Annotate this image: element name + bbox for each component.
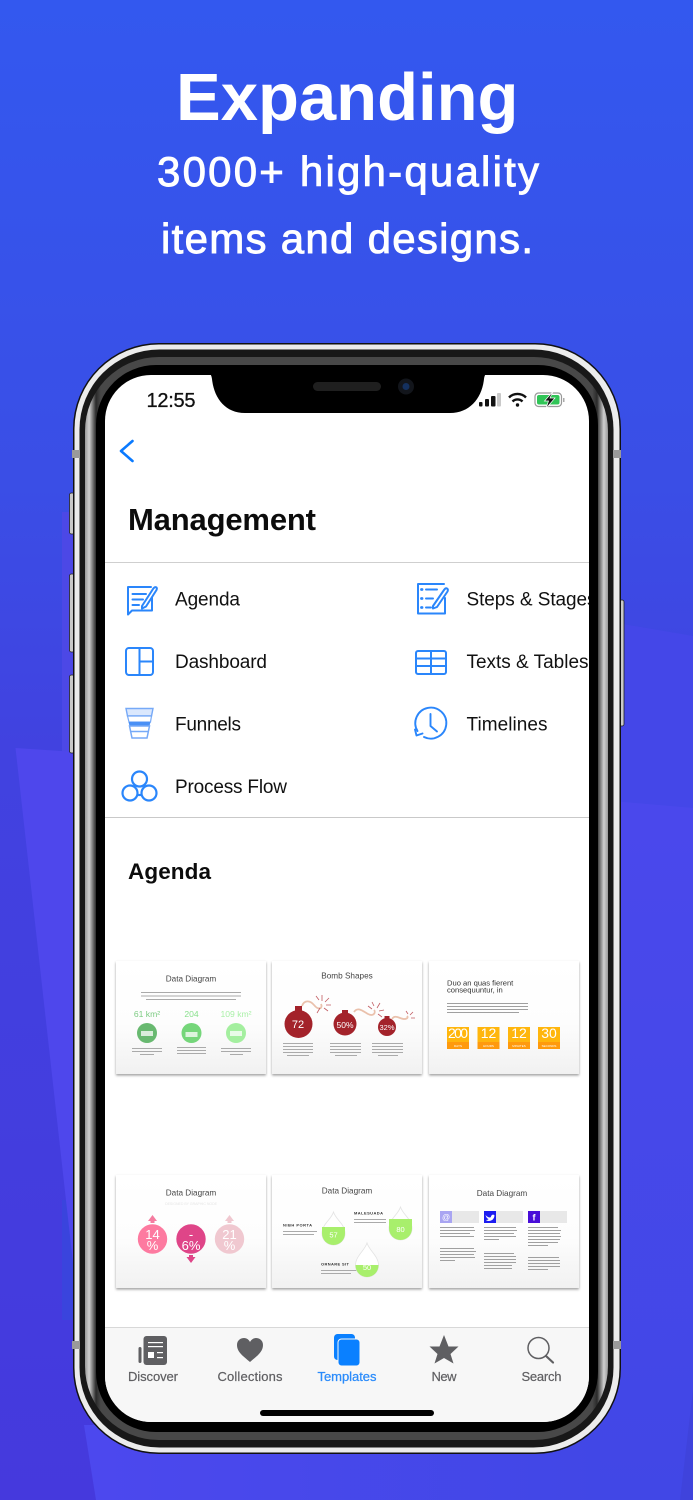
- card: bomb shapes: 32%: [379, 1023, 395, 1032]
- item: Timelines: Timelines: [466, 714, 548, 736]
- tab: New: New: [432, 1369, 457, 1384]
- card: social columns: @: [442, 1213, 450, 1222]
- phone body: [72, 343, 621, 1454]
- card: countdown: 30: [541, 1025, 557, 1041]
- time: 12:55: [146, 390, 196, 412]
- card: pink percentages: %: [147, 1238, 159, 1253]
- card: green data diagram: 61 km²: [134, 1009, 160, 1019]
- item: Dashboard: [126, 648, 267, 675]
- card: pink percentages: 21: [222, 1227, 237, 1242]
- screen: [105, 375, 589, 1422]
- item: Texts & Tables: [416, 651, 588, 674]
- card: countdown: consequuntur, in: [447, 986, 503, 994]
- thumbnail grid: [116, 961, 579, 1288]
- icon: process flow: [122, 772, 156, 800]
- card: social columns: f: [532, 1212, 536, 1222]
- card: countdown: DAYS: [454, 1044, 462, 1048]
- icon: clock: [415, 708, 446, 739]
- card: green data diagram: 204: [184, 1009, 199, 1019]
- tab: Discover: Discover: [128, 1369, 179, 1384]
- category list: [122, 584, 596, 800]
- icon: templates: [334, 1334, 360, 1366]
- card: countdown: HOURS: [483, 1044, 494, 1048]
- card: bomb shapes: 72: [292, 1019, 304, 1031]
- icon: dashboard: [126, 648, 153, 675]
- card: countdown: [429, 961, 579, 1074]
- card: green data diagram: Data Diagram: [166, 974, 216, 984]
- tab bar: [105, 1327, 589, 1422]
- tab: Templates: [318, 1334, 377, 1384]
- heading: Expanding: Expanding: [176, 60, 518, 135]
- icon: newspaper: [138, 1336, 167, 1365]
- title: [157, 60, 539, 262]
- card: pink percentages: DESIGNED BY GRAPHIC NODE: [165, 1202, 218, 1206]
- card: countdown: 12: [481, 1025, 496, 1041]
- wifi: [509, 394, 526, 406]
- home indicator: [260, 1410, 434, 1416]
- card: bomb shapes: 50%: [336, 1020, 354, 1030]
- subtitle line 2: items and designs.: [161, 215, 533, 262]
- icon: star: [430, 1335, 458, 1364]
- status bar: [146, 390, 564, 412]
- icon: agenda: [128, 587, 157, 614]
- tab: Search: Search: [522, 1369, 562, 1384]
- signal: [479, 393, 501, 406]
- item: Funnels: Funnels: [175, 714, 241, 736]
- item: Steps & Stages: [418, 584, 596, 614]
- icon: steps: [418, 584, 448, 614]
- item: Steps & Stages: Steps & Stages: [466, 590, 596, 610]
- card: countdown: Duo an quas fierent: [447, 978, 514, 988]
- tab: Templates: Templates: [318, 1369, 377, 1384]
- phone: [70, 343, 624, 1454]
- card: countdown: MINUTES: [512, 1044, 526, 1048]
- icon: funnels: [126, 708, 153, 738]
- card: green drops: Data Diagram: [322, 1186, 372, 1196]
- side buttons: [70, 493, 624, 753]
- subtitle line 1: 3000+ high-quality: [157, 148, 539, 195]
- section heading: Agenda: Agenda: [128, 859, 211, 884]
- item: Process Flow: [122, 772, 287, 800]
- item: Agenda: Agenda: [175, 590, 240, 610]
- tab: Search: [522, 1338, 562, 1384]
- card: bomb shapes: Bomb Shapes: [321, 972, 373, 980]
- tab: Collections: Collections: [218, 1369, 283, 1384]
- card: pink percentages: 6%: [182, 1238, 201, 1253]
- card: pink percentages: -: [189, 1227, 193, 1242]
- back chevron: [121, 441, 132, 461]
- card: green drops: [272, 1175, 422, 1288]
- speaker and camera: [313, 378, 414, 394]
- notch: [208, 372, 488, 413]
- card: countdown: 200: [448, 1025, 468, 1041]
- icon: heart: [237, 1338, 263, 1362]
- item: Funnels: [126, 708, 241, 738]
- card: countdown: SECONDS: [542, 1044, 556, 1048]
- item: Dashboard: Dashboard: [175, 652, 267, 673]
- item: Process Flow: Process Flow: [175, 777, 287, 798]
- card: bomb shapes: [272, 961, 422, 1074]
- card: green drops: 50: [363, 1263, 371, 1272]
- card: green drops: ORNARE SIT: [321, 1262, 350, 1266]
- tab: Discover: [128, 1336, 179, 1384]
- icon: table: [416, 651, 446, 674]
- card: green drops: NIBH PORTA: [283, 1222, 312, 1228]
- page title: Management: [128, 502, 316, 537]
- battery: [535, 392, 564, 408]
- item: Agenda: [128, 587, 240, 614]
- card: green drops: 57: [329, 1230, 338, 1240]
- card: pink percentages: 14: [145, 1227, 160, 1242]
- item: Texts & Tables: Texts & Tables: [466, 652, 588, 673]
- tab: Collections: [218, 1338, 283, 1384]
- card: green drops: MALESUADA: [354, 1210, 383, 1216]
- card: countdown: 12: [511, 1025, 527, 1041]
- card: social columns: Data Diagram: [477, 1189, 527, 1198]
- card: green data diagram: [116, 961, 266, 1074]
- card: pink percentages: Data Diagram: [166, 1188, 216, 1198]
- tab: New: [430, 1335, 458, 1384]
- card: green drops: 80: [396, 1225, 405, 1234]
- icon: magnifier: [528, 1338, 553, 1362]
- card: social columns: [429, 1175, 579, 1288]
- card: pink percentages: [116, 1175, 266, 1288]
- card: green data diagram: 109 km²: [220, 1009, 252, 1019]
- item: Timelines: [415, 708, 548, 739]
- card: pink percentages: %: [224, 1238, 236, 1253]
